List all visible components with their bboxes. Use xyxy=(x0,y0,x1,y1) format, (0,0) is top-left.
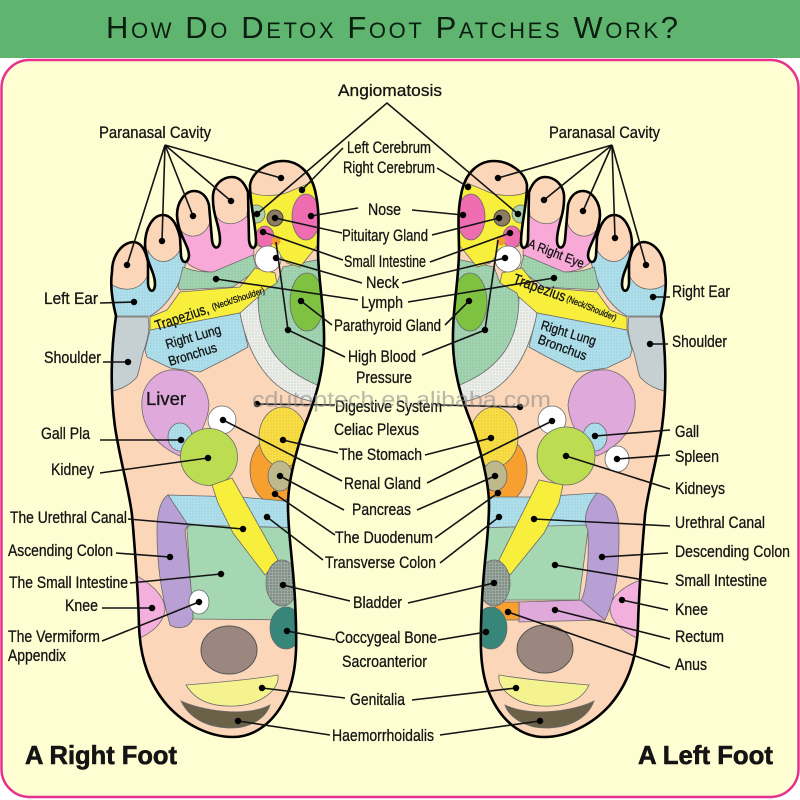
callout: Kidneys: Kidneys xyxy=(675,479,725,498)
zone: big toe yellow xyxy=(455,181,527,267)
zone: knee xyxy=(610,578,647,642)
zone: big toe yellow xyxy=(250,181,322,267)
callout: Urethral Canal xyxy=(534,513,765,532)
zone: descending colon xyxy=(581,493,619,620)
callout: Pancreas xyxy=(280,476,495,519)
zone: haemorrhoidalis xyxy=(181,701,270,728)
zone: anus xyxy=(495,602,519,620)
callout: Lymph xyxy=(216,278,554,312)
callout: Paranasal Cavity, right foot xyxy=(99,123,281,265)
callout: Spleen: Spleen xyxy=(675,447,719,466)
callout: Parathyroid Gland xyxy=(301,301,469,335)
callout: Urethral Canal: Urethral Canal xyxy=(675,513,765,532)
zone: ear xyxy=(590,250,664,316)
zone: white band xyxy=(240,297,325,402)
zone: ascending colon xyxy=(157,495,193,628)
in-foot labels: left foot: Trapezius xyxy=(511,271,568,306)
callout: Descending Colon xyxy=(602,542,790,561)
zone: bladder xyxy=(266,560,298,606)
callout: Angiomatosis: Angiomatosis xyxy=(338,81,442,100)
callout: Knee, left foot: Knee xyxy=(675,600,708,619)
zone: pancreas xyxy=(483,461,507,491)
callout: The Stomach: The Stomach xyxy=(339,445,422,464)
callout: Gall Pla: Gall Pla xyxy=(41,424,90,443)
zone: parathyroid xyxy=(453,273,487,331)
in-foot labels: right foot: (Neck/Shoulder) xyxy=(211,285,266,312)
zone: kidney xyxy=(180,428,238,486)
callout: The Vermiform Appendix xyxy=(8,602,199,665)
callout: Right Cerebrum: Right Cerebrum xyxy=(343,158,435,177)
zone: small intestine xyxy=(256,226,274,248)
zone: duodenum xyxy=(250,444,292,500)
callout: Coccygeal Bone Sacroanterior xyxy=(287,628,486,671)
zone: angiomatosis xyxy=(512,205,530,223)
callout: Ascending Colon: Ascending Colon xyxy=(8,541,113,560)
foot base xyxy=(460,162,664,736)
zone: genitalia xyxy=(499,675,589,706)
callout: High Blood Pressure: Pressure xyxy=(356,368,412,387)
callout: Knee, right foot: Knee xyxy=(65,596,98,615)
zone: shoulder xyxy=(113,316,150,392)
callout: Anus xyxy=(508,612,707,674)
zone: gall xyxy=(168,423,192,451)
left foot outline xyxy=(453,161,666,737)
zone: bladder xyxy=(478,560,510,606)
callout: Kidney xyxy=(51,458,208,479)
callout: Kidneys xyxy=(566,456,725,498)
callout: High Blood Pressure xyxy=(276,240,498,387)
zone: orange spot xyxy=(496,236,506,246)
callout: Knee, right foot xyxy=(65,596,152,615)
zone: right lung bronchus xyxy=(145,313,248,372)
callout: The Stomach xyxy=(283,438,491,464)
callout: Angiomatosis xyxy=(257,81,518,214)
callout: Neck xyxy=(276,258,505,292)
in-foot labels: left foot: (Neck/Shoulder) xyxy=(565,294,618,323)
callout: Left Ear xyxy=(44,289,134,308)
zone: nose xyxy=(292,194,320,240)
callout: Shoulder, left foot xyxy=(650,332,727,351)
callout: Gall: Gall xyxy=(675,422,699,441)
zone: appendix xyxy=(189,590,209,614)
zone: orange spot xyxy=(272,236,280,246)
zone: nose xyxy=(457,194,485,240)
zone: rectum xyxy=(519,600,605,622)
callout: Shoulder, right foot: Shoulder xyxy=(44,348,101,367)
callout: Left Ear: Left Ear xyxy=(44,289,98,308)
zone: renal gland xyxy=(538,406,566,434)
zone: lymph band xyxy=(520,255,599,290)
zone: under-toe pink xyxy=(181,216,254,272)
callout: Genitalia: Genitalia xyxy=(350,690,405,709)
callout: The Urethral Canal: The Urethral Canal xyxy=(10,508,127,527)
zone: pancreas xyxy=(268,461,292,491)
in-foot labels: left foot: Right Lung xyxy=(539,318,598,349)
callout: Kidney: Kidney xyxy=(51,460,94,479)
in-foot labels: right foot: Trapezius, xyxy=(153,300,211,335)
callout: Left Cerebrum: Left Cerebrum xyxy=(347,138,431,157)
callout: Transverse Colon xyxy=(267,517,499,572)
callout: Paranasal Cavity, left foot: Paranasal Cavity xyxy=(549,123,660,142)
callout: Transverse Colon: Transverse Colon xyxy=(325,553,436,572)
zone: transverse colon xyxy=(167,494,288,528)
zone: neck xyxy=(255,246,281,272)
zone: genitalia xyxy=(186,675,278,706)
callout: Right Ear xyxy=(653,282,730,301)
callout: Gall xyxy=(595,422,699,441)
zone: spleen xyxy=(605,446,629,472)
callout: Pancreas: Pancreas xyxy=(352,500,411,519)
callout: Bladder: Bladder xyxy=(353,593,402,612)
zone: heel xyxy=(201,626,257,674)
title banner xyxy=(0,0,800,58)
zone: ear xyxy=(112,250,186,316)
callout: Digestive System: Digestive System xyxy=(335,397,442,416)
zone: renal gland xyxy=(208,406,236,434)
watermark: cdutoptech.en.alibaba.com xyxy=(252,387,551,412)
heading: A Right Foot: A Right Foot xyxy=(25,740,177,770)
callout: Pituitary Gland: Pituitary Gland xyxy=(342,226,428,245)
right foot outline xyxy=(111,161,324,737)
callout: Rectum xyxy=(555,610,724,646)
in-foot labels: right foot: Right Lung xyxy=(164,322,223,352)
zone: high blood pressure xyxy=(258,259,323,384)
callout: Nose xyxy=(311,200,463,219)
callout: Small Intestine, left foot: Small Intestine xyxy=(675,571,767,590)
zone: right lung bronchus xyxy=(529,313,632,372)
zone: parathyroid xyxy=(290,273,324,331)
callout: Renal Gland: Renal Gland xyxy=(344,474,421,493)
in-foot labels: left foot: A Right Eye xyxy=(526,236,586,271)
title: How Do Detox Foot Patches Work? xyxy=(106,10,678,45)
zone: urethral canal xyxy=(499,480,563,575)
callout: Coccygeal Bone Sacroanterior: Sacroanterior xyxy=(342,652,427,671)
callout: Neck: Neck xyxy=(366,273,399,292)
zone: transverse colon xyxy=(482,493,597,530)
zone: white band xyxy=(452,297,537,402)
callout: Celiac Plexus: Celiac Plexus xyxy=(334,420,419,439)
callout: Gall Pla xyxy=(41,424,181,443)
zone: trapezius xyxy=(150,268,277,330)
callout: Coccygeal Bone Sacroanterior: Coccygeal Bone xyxy=(335,628,437,647)
callout: Knee, left foot xyxy=(622,600,708,619)
callout: Renal Gland xyxy=(223,420,552,493)
callout: Parathyroid Gland: Parathyroid Gland xyxy=(334,316,441,335)
callout: Spleen xyxy=(617,447,719,466)
callout: Right Cerebrum xyxy=(343,158,468,187)
heading: A Left Foot: A Left Foot xyxy=(638,740,773,770)
zone: angiomatosis xyxy=(247,205,265,223)
callout: Lymph: Lymph xyxy=(361,293,403,312)
zone: liver xyxy=(142,370,209,456)
zone: pituitary xyxy=(494,210,510,226)
zone: lymph band xyxy=(178,255,257,290)
zone: coccygeal bone xyxy=(475,607,507,649)
foot base xyxy=(112,162,317,736)
zone: gall xyxy=(583,423,607,451)
callout: Nose: Nose xyxy=(368,200,401,219)
zone: knee xyxy=(138,576,166,638)
in-foot labels: right foot: Bronchus xyxy=(166,340,219,369)
callout: Left Cerebrum xyxy=(302,138,431,190)
zone: small intestine sole xyxy=(477,525,588,600)
zone: duodenum xyxy=(477,437,527,503)
callout: Haemorrhoidalis xyxy=(238,721,540,745)
callout: The Duodenum xyxy=(275,493,498,547)
zone: pituitary xyxy=(267,210,283,226)
in-foot labels: left foot: Bronchus xyxy=(536,332,589,363)
zone: shoulder xyxy=(628,317,669,392)
zone: haemorrhoidalis xyxy=(505,701,594,728)
callout: Shoulder, left foot: Shoulder xyxy=(672,332,727,351)
callout: Small Intestine, left foot xyxy=(555,565,767,590)
callout: Paranasal Cavity, left foot xyxy=(498,123,660,265)
callout: Genitalia xyxy=(262,688,516,709)
zone: right eye pink xyxy=(522,216,596,272)
callout: The Duodenum: The Duodenum xyxy=(335,528,433,547)
in-foot labels: right foot xyxy=(146,285,266,409)
zone: neck xyxy=(495,246,521,272)
callout: High Blood Pressure: High Blood xyxy=(348,347,416,366)
callout: The Vermiform Appendix: The Vermiform xyxy=(8,627,100,646)
zone: coccygeal bone xyxy=(270,606,295,650)
callout: The Small Intestine: The Small Intestine xyxy=(9,573,128,592)
callout: The Urethral Canal xyxy=(10,508,243,529)
in-foot labels: left foot xyxy=(511,236,618,363)
zone: heel xyxy=(517,625,573,673)
callout: Pituitary Gland xyxy=(275,218,499,245)
callout: Anus: Anus xyxy=(675,655,707,674)
zone: stomach xyxy=(470,407,518,467)
zone: small intestine sole xyxy=(187,525,300,620)
callout: Small Intestine xyxy=(263,232,510,271)
callout: Digestive System xyxy=(257,397,520,416)
zone: urethral canal xyxy=(212,478,278,575)
zone: high blood pressure xyxy=(447,258,519,392)
illustration: right foot reflexology zones xyxy=(100,150,330,750)
zone: stomach xyxy=(259,407,307,467)
zone: liver xyxy=(568,370,635,456)
callout: Rectum: Rectum xyxy=(675,627,724,646)
callout: Paranasal Cavity, right foot: Paranasal Cavity xyxy=(99,123,211,142)
illustration: left foot reflexology zones xyxy=(447,150,677,750)
callout: Haemorrhoidalis: Haemorrhoidalis xyxy=(332,726,434,745)
in-foot labels: right foot: Liver xyxy=(146,389,186,409)
callout: The Vermiform Appendix: Appendix xyxy=(8,646,66,665)
callout: Small Intestine: Small Intestine xyxy=(344,252,426,271)
zone: small intestine xyxy=(503,226,521,248)
zone: kidney xyxy=(537,427,595,485)
callout: The Small Intestine xyxy=(9,573,221,592)
callout: Bladder xyxy=(283,583,494,612)
callout: Right Ear: Right Ear xyxy=(672,282,730,301)
zone: trapezius xyxy=(500,268,627,330)
